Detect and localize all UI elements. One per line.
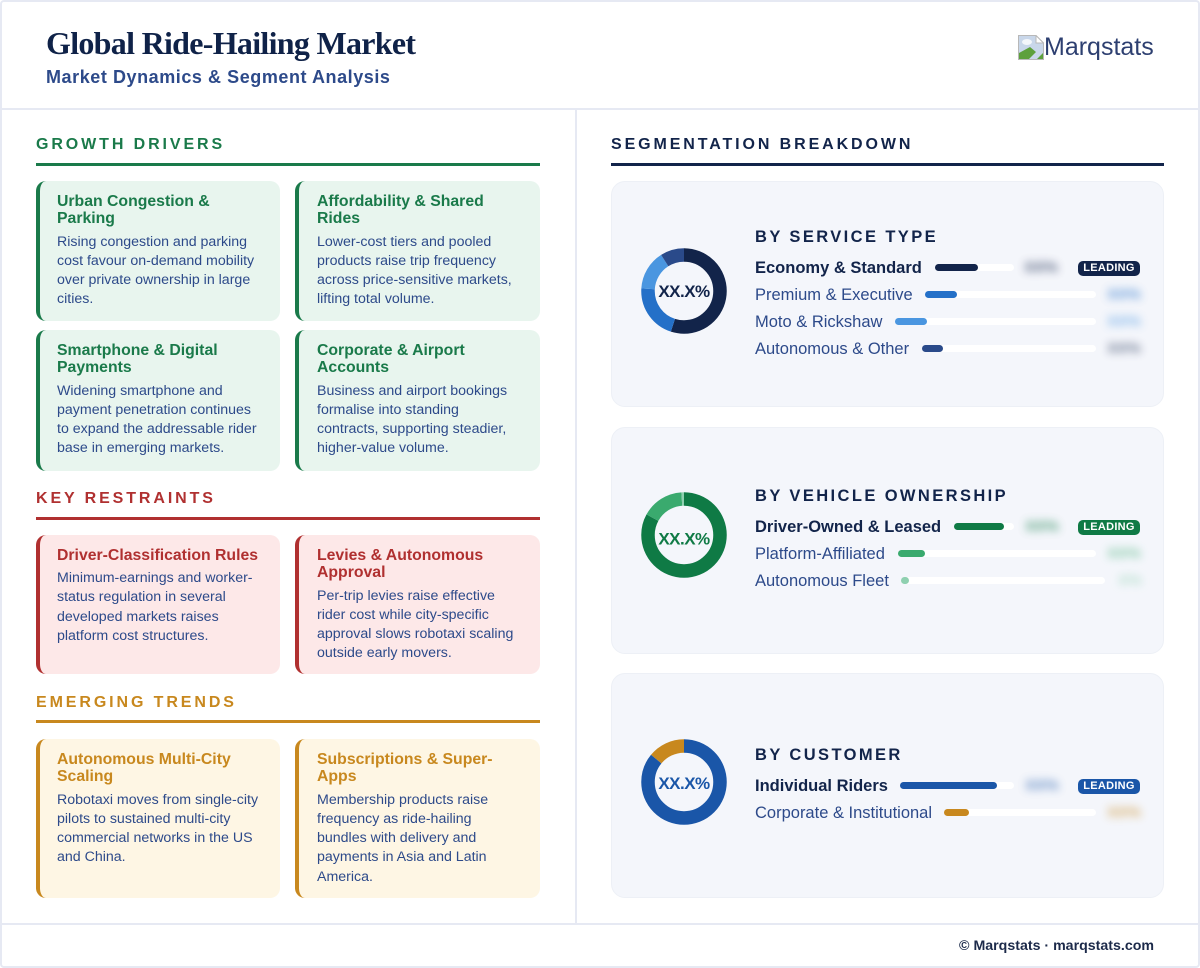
heading: growth drivers: GROWTH DRIVERS xyxy=(36,136,225,153)
row: driver-owned and leased: XX% xyxy=(1025,518,1059,535)
card: urban congestion: over private ownership in large xyxy=(57,272,250,288)
row: platform-affiliated xyxy=(755,544,1144,563)
row: autonomous and other: XX% xyxy=(1107,340,1141,357)
panel: by vehicle ownership xyxy=(611,427,1164,654)
card: subscriptions: Subscriptions & Super- xyxy=(317,750,493,768)
card: corporate: Accounts xyxy=(317,359,389,376)
row: individual riders: Individual Riders xyxy=(755,777,888,795)
title: Global Ride-Hailing Market xyxy=(46,25,415,61)
card: corporate: Business and airport bookings xyxy=(317,383,507,399)
card: subscriptions: frequency as ride-hailing xyxy=(317,811,472,827)
card: subscriptions: payments in Asia and Latin xyxy=(317,849,487,865)
row: autonomous fleet xyxy=(755,572,1143,590)
card: autonomous scaling: commercial networks in the US xyxy=(57,830,253,846)
row: autonomous fleet: Autonomous Fleet xyxy=(755,572,889,590)
card: autonomous scaling: Robotaxi moves from single-city xyxy=(57,792,258,808)
row: autonomous and other xyxy=(755,338,1144,358)
card: affordability: products raise trip frequency xyxy=(317,253,496,269)
donut: customer xyxy=(641,739,727,825)
donut: service type: XX.X% xyxy=(658,282,710,301)
row: premium and executive: Premium & Executive xyxy=(755,286,913,304)
card: levies: Per-trip levies raise effective xyxy=(317,588,495,604)
card: autonomous scaling: pilots to sustained multi-city xyxy=(57,811,230,827)
donut: service type xyxy=(641,248,727,334)
card: smartphone: payment penetration continues xyxy=(57,402,251,418)
card: corporate: formalise into standing xyxy=(317,402,459,418)
card: urban congestion: Parking xyxy=(57,210,115,227)
card: autonomous scaling: Autonomous Multi-City xyxy=(57,750,231,768)
row: economy and standard: LEADING xyxy=(1083,262,1135,274)
card: autonomous scaling: and China. xyxy=(57,849,126,865)
panel: by customer xyxy=(611,673,1164,898)
row: premium and executive: XX% xyxy=(1107,286,1141,303)
card: driver classification: Minimum-earnings and worker- xyxy=(57,570,253,586)
row: autonomous and other: Autonomous & Other xyxy=(755,340,909,358)
row: economy and standard: XX% xyxy=(1024,259,1058,276)
heading: key restraints: KEY RESTRAINTS xyxy=(36,490,216,507)
card: affordability: lifting total volume. xyxy=(317,291,434,307)
card: smartphone xyxy=(36,330,280,471)
card: driver classification: developed markets raises xyxy=(57,608,219,624)
card: subscriptions: America. xyxy=(317,868,373,884)
row: corporate and institutional: XX% xyxy=(1107,804,1141,821)
card: driver classification xyxy=(36,535,280,674)
card: affordability: across price-sensitive markets, xyxy=(317,272,512,288)
card: subscriptions: bundles with delivery and xyxy=(317,830,476,846)
card: urban congestion: cities. xyxy=(57,291,93,307)
row: corporate and institutional: Corporate & Institutional xyxy=(755,804,932,822)
column divider xyxy=(575,110,577,924)
row: driver-owned and leased: Driver-Owned & Leased xyxy=(755,518,941,536)
heading: segmentation breakdown: SEGMENTATION BREAKDOWN xyxy=(611,136,913,153)
card: driver classification: Driver-Classification Rules xyxy=(57,546,258,564)
footer text: © Marqstats · marqstats.com xyxy=(959,938,1154,954)
panel: by service type xyxy=(611,181,1164,407)
row: platform-affiliated: XX% xyxy=(1107,545,1141,562)
heading: emerging trends: EMERGING TRENDS xyxy=(36,694,237,711)
logo xyxy=(1018,33,1154,61)
card: driver classification: status regulation in several xyxy=(57,589,226,605)
card: affordability xyxy=(295,181,540,321)
card: urban congestion: cost favour on-demand mobility xyxy=(57,253,254,269)
card: corporate: contracts, supporting steadier, xyxy=(317,421,506,437)
card: corporate: Corporate & Airport xyxy=(317,342,465,358)
donut: vehicle ownership xyxy=(641,492,727,578)
row: driver-owned and leased xyxy=(755,516,1140,536)
card: corporate xyxy=(295,330,540,471)
card: levies: approval slows robotaxi scaling xyxy=(317,626,513,642)
donut: customer: XX.X% xyxy=(658,774,710,793)
row: corporate and institutional xyxy=(755,802,1145,822)
row: moto and rickshaw: Moto & Rickshaw xyxy=(755,313,882,331)
card: levies: Levies & Autonomous xyxy=(317,546,483,564)
card: corporate: higher-value volume. xyxy=(317,440,449,456)
row: moto and rickshaw xyxy=(755,312,1144,331)
row: economy and standard xyxy=(755,257,1140,277)
subtitle: Market Dynamics & Segment Analysis xyxy=(46,67,390,87)
card: subscriptions: Apps xyxy=(317,768,356,785)
card: smartphone: to expand the addressable rider xyxy=(57,421,257,437)
row: autonomous fleet: X% xyxy=(1118,572,1142,589)
icon: broken image xyxy=(1018,35,1044,60)
card: affordability: Lower-cost tiers and pooled xyxy=(317,234,491,250)
card: subscriptions: Membership products raise xyxy=(317,792,488,808)
card: levies: Approval xyxy=(317,564,385,581)
panel title: customer: BY CUSTOMER xyxy=(755,746,903,764)
row: individual riders xyxy=(755,775,1140,795)
card: levies xyxy=(295,535,540,674)
card: autonomous scaling: Scaling xyxy=(57,768,113,785)
footer xyxy=(2,923,1198,966)
row: economy and standard: Economy & Standard xyxy=(755,259,922,277)
donut: vehicle ownership: XX.X% xyxy=(658,530,710,548)
card: smartphone: Payments xyxy=(57,359,132,376)
card: smartphone: Smartphone & Digital xyxy=(57,342,218,358)
panel title: service type: BY SERVICE TYPE xyxy=(755,228,938,246)
panel title: vehicle ownership: BY VEHICLE OWNERSHIP xyxy=(755,487,1008,505)
row: individual riders: LEADING xyxy=(1083,780,1135,792)
card: subscriptions xyxy=(295,739,540,898)
card: levies: rider cost while city-specific xyxy=(317,607,489,623)
card: autonomous scaling xyxy=(36,739,280,898)
row: platform-affiliated: Platform-Affiliated xyxy=(755,545,885,563)
card: urban congestion xyxy=(36,181,280,321)
row: driver-owned and leased: LEADING xyxy=(1083,521,1135,533)
card: levies: outside early movers. xyxy=(317,645,452,661)
card: urban congestion: Rising congestion and parking xyxy=(57,234,247,250)
row: individual riders: XX% xyxy=(1025,777,1059,794)
card: affordability: Affordability & Shared xyxy=(317,192,484,210)
row: moto and rickshaw: XX% xyxy=(1107,313,1141,330)
row: premium and executive xyxy=(755,284,1144,304)
header xyxy=(2,2,1198,110)
card: smartphone: base in emerging markets. xyxy=(57,440,224,456)
logo text: Marqstats xyxy=(1044,33,1154,61)
card: smartphone: Widening smartphone and xyxy=(57,383,223,399)
card: driver classification: platform cost structures. xyxy=(57,628,208,644)
card: urban congestion: Urban Congestion & xyxy=(57,192,210,210)
card: affordability: Rides xyxy=(317,210,360,227)
